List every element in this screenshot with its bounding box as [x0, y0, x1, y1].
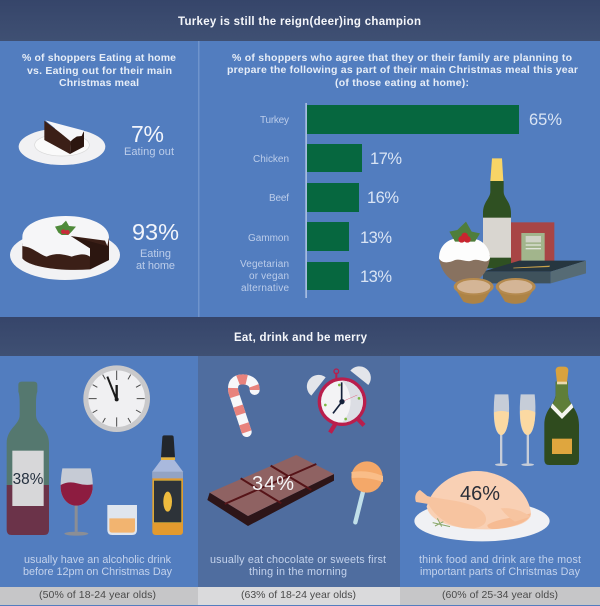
band: 18-24 alcohol: (50% of 18-24 year olds) — [39, 589, 156, 601]
icon: champagne flutes — [494, 394, 535, 466]
bar: turkey — [260, 105, 562, 134]
band: 18-24 alcohol — [0, 587, 198, 605]
icon: dark gift box — [483, 261, 586, 283]
caption: food and drink: important parts of Christmas Day — [420, 566, 581, 578]
bar: chicken: 17% — [370, 150, 402, 168]
stat: 93% eating at home: Eating — [140, 248, 171, 260]
bar: beef: Beef — [269, 193, 289, 204]
heading: eating at home vs out: % of shoppers Eating at home — [22, 52, 176, 64]
caption: alcoholic drink — [23, 554, 173, 578]
icon: whisky tumbler — [107, 505, 137, 535]
band: 18-24 chocolate: (63% of 18-24 year olds) — [241, 589, 356, 601]
stat: 93% eating at home: 93% — [132, 219, 179, 245]
illustration: christmas dinner items — [439, 158, 586, 304]
icon: wall clock — [83, 365, 150, 432]
caption: food and drink — [419, 554, 581, 578]
caption: chocolate: usually eat chocolate or sweets first — [210, 554, 386, 566]
icon: christmas cake on plate — [10, 216, 120, 280]
divider between top panels — [198, 41, 200, 317]
bar: gammon: Gammon — [248, 233, 289, 244]
stat: 7% eating out: Eating out — [124, 146, 174, 158]
heading: chart: % of shoppers who agree that they or their family are planning to — [232, 52, 572, 64]
panel: eat and drink column middle — [198, 356, 400, 587]
heading: chart: (of those eating at home): — [335, 77, 469, 89]
bar: vegetarian or vegan: alternative — [241, 283, 289, 294]
stat: 7% eating out — [124, 121, 174, 158]
band: 25-34 food — [400, 587, 600, 605]
caption: food and drink: think food and drink are the most — [419, 554, 581, 566]
bar: gammon: 13% — [360, 229, 392, 247]
panel: chocolate — [207, 366, 386, 578]
bar: chicken — [253, 144, 402, 172]
icon: chocolate bar — [207, 455, 334, 526]
bar: turkey: 65% — [529, 111, 562, 129]
caption: chocolate: thing in the morning — [249, 566, 347, 578]
bar: gammon — [248, 222, 392, 251]
icon: turkey on plate: 46% — [460, 483, 500, 505]
header: eat drink and be merry — [0, 317, 600, 356]
bar chart — [240, 103, 562, 298]
bar: beef — [269, 183, 399, 212]
band: 18-24 chocolate — [198, 587, 400, 605]
band: 25-34 food: (60% of 25-34 year olds) — [442, 589, 558, 601]
icon: christmas pudding — [439, 222, 490, 284]
panel: alcoholic drink — [7, 365, 183, 578]
icon: wine glass — [61, 468, 93, 536]
icon: cake slice on plate — [19, 120, 105, 165]
caption: alcoholic drink: usually have an alcoholic drink — [24, 554, 172, 566]
bar: chicken: Chicken — [253, 154, 289, 165]
icon: turkey on plate — [414, 471, 550, 541]
panel: food and drink — [414, 367, 581, 578]
bar: vegetarian or vegan: Vegetarian — [240, 259, 289, 270]
bar: turkey: Turkey — [260, 115, 289, 126]
caption: alcoholic drink: before 12pm on Christmas Day — [23, 566, 173, 578]
icon: sherry bottle — [483, 158, 511, 268]
icon: red box — [511, 222, 554, 264]
heading: eating at home vs out: vs. Eating out for their main — [27, 65, 172, 77]
bar: vegetarian or vegan — [240, 259, 392, 294]
icon: champagne bottle — [544, 367, 579, 465]
bar: vegetarian or vegan: 13% — [360, 268, 392, 286]
heading: chart — [227, 52, 578, 89]
heading: chart: prepare the following as part of their main Christmas meal this year — [227, 64, 578, 76]
stat: 93% eating at home: at home — [136, 260, 175, 272]
icon: whisky bottle — [152, 435, 183, 535]
bar: beef: 16% — [367, 189, 399, 207]
stat: 93% eating at home — [132, 219, 179, 272]
bar: vegetarian or vegan: or vegan — [249, 271, 289, 282]
icon: candy cane — [233, 379, 255, 432]
caption: chocolate — [210, 554, 386, 578]
stat: 7% eating out: 7% — [131, 121, 164, 147]
icon: alarm clock — [307, 366, 371, 433]
heading: eating at home vs out: Christmas meal — [59, 77, 139, 89]
icon: lollipop — [351, 461, 383, 522]
heading: eating at home vs out — [22, 52, 176, 89]
header: turkey — [0, 0, 600, 41]
icon: wine bottle 38% — [7, 382, 49, 535]
header: eat drink and be merry: Eat, drink and be merry — [234, 332, 368, 344]
icon: mince pies — [454, 278, 536, 304]
header: turkey: Turkey is still the reign(deer)ing champion — [178, 16, 421, 28]
icon: chocolate bar: 34% — [252, 473, 294, 495]
icon: wine bottle 38%: 38% — [13, 471, 44, 488]
